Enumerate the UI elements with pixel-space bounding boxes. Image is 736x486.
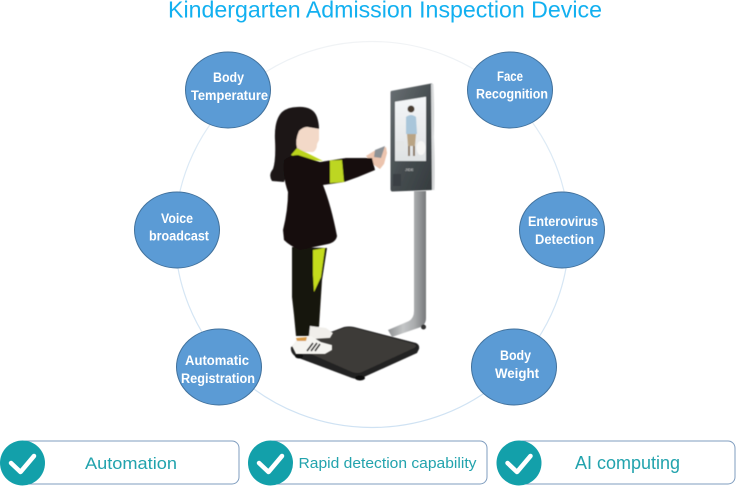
feature: Body Temperature: Temperature (191, 88, 268, 103)
feature: Enterovirus Detection: Enterovirus (528, 214, 598, 229)
benefit: AI computing: AI computing (575, 453, 680, 473)
child: ponytail and hair (270, 107, 319, 182)
device logo: JIDE (405, 167, 414, 172)
feature: Automatic Registration (176, 329, 262, 405)
benefit: Automation (0, 440, 239, 486)
feature: Automatic Registration: Registration (181, 371, 255, 386)
child: jacket (283, 155, 375, 250)
feature: Body Weight: Body (500, 348, 531, 363)
feature: Voice broadcast (134, 192, 220, 268)
feature: Voice broadcast: broadcast (149, 228, 209, 244)
feature: Face Recognition: Face (497, 69, 523, 84)
feature: Enterovirus Detection (520, 192, 604, 268)
child: face (296, 127, 319, 152)
feature: Voice broadcast: Voice (161, 211, 193, 226)
screen: boy photo (396, 106, 426, 156)
feature: Body Temperature (186, 52, 270, 128)
feature: Body Weight (472, 329, 556, 405)
feature: Face Recognition: Recognition (476, 86, 548, 102)
child: trousers (292, 247, 327, 336)
device: weighing platform (291, 326, 419, 380)
feature: Body Weight: Weight (495, 366, 539, 381)
device: terminal screen (390, 84, 434, 192)
benefit: AI computing (496, 440, 735, 486)
benefit: Rapid detection capability (248, 440, 487, 486)
benefit: Rapid detection capability: Rapid detection capability (298, 456, 477, 472)
child: hand holding card (366, 147, 387, 169)
orbit ring (175, 42, 569, 428)
feature: Face Recognition (468, 52, 552, 128)
child figure (270, 107, 387, 354)
child: collar (291, 148, 323, 161)
child: shoes (309, 326, 333, 339)
benefit: Automation: Automation (85, 454, 177, 473)
device: stand and arm (388, 191, 426, 337)
feature: Body Temperature: Body (213, 70, 244, 85)
feature: Automatic Registration: Automatic (185, 353, 249, 368)
feature: Enterovirus Detection: Detection (535, 232, 594, 247)
